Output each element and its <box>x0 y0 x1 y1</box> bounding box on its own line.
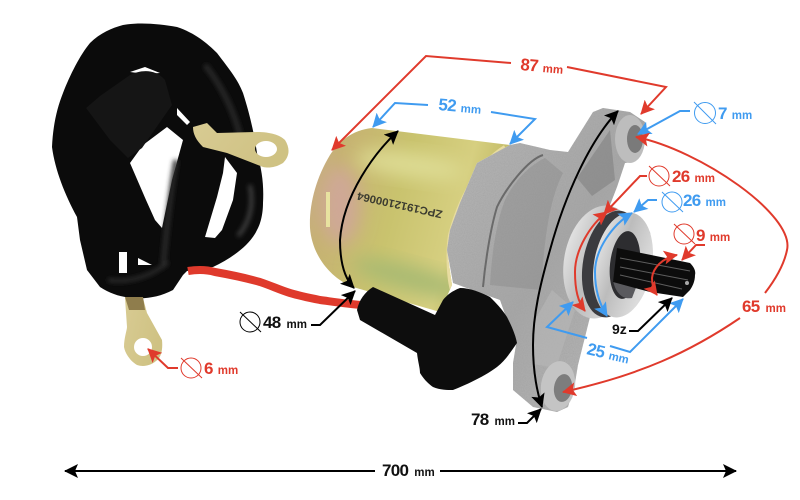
dimension: 52 mm can length: 52 mm <box>438 95 482 118</box>
black sleeved cable loop <box>52 24 263 298</box>
dimension: 9 teeth <box>612 298 672 337</box>
rubber boot loop <box>86 71 172 158</box>
dimension: 26 mm blue nose diameter: 26 mm <box>683 191 726 210</box>
dimension: 700 mm cable length: 700 mm <box>382 461 435 480</box>
rubber o-ring <box>574 206 650 322</box>
engraved serial number: ZPC1912100064 <box>355 189 444 220</box>
machined flange ring <box>555 200 645 324</box>
bottom mounting hole <box>552 373 574 403</box>
aluminium housing and flange <box>447 108 653 413</box>
dimension: 7 mm mounting hole <box>638 102 752 134</box>
dimension: 6 mm terminal hole <box>148 349 238 378</box>
dimension: 9 mm shaft diameter: 9 mm <box>696 226 730 245</box>
steel motor can <box>310 128 510 312</box>
top mounting boss <box>615 115 645 163</box>
dimension: 26 mm blue nose diameter <box>595 191 726 316</box>
rubber terminal boot <box>357 287 517 390</box>
housing shading <box>483 155 543 287</box>
dimension: 25 mm nose length <box>547 299 683 368</box>
dimension: 65 mm hole spacing: 65 mm <box>742 297 786 316</box>
dimension: 87 mm overall length: 87 mm <box>520 55 564 78</box>
dimension: 6 mm terminal hole: 6 mm <box>204 359 238 378</box>
dimension: 9 mm shaft diameter <box>652 224 730 295</box>
dimension: 48 mm can diameter <box>240 131 398 332</box>
bottom mounting boss <box>538 359 578 413</box>
dimension: 7 mm mounting hole: 7 mm <box>718 104 752 123</box>
top mounting hole <box>627 125 643 153</box>
cable bundle with terminals <box>52 24 362 366</box>
dimension: 78 mm flange height <box>471 111 618 429</box>
starter motor <box>310 108 695 413</box>
dimension: 48 mm can diameter: 48 mm <box>263 313 307 332</box>
cable highlights <box>108 65 252 281</box>
dimension: 52 mm can length <box>373 95 535 144</box>
dimension: 26 mm red flange diameter: 26 mm <box>672 167 715 186</box>
dimension: 65 mm hole spacing <box>563 137 787 392</box>
front nose disc <box>585 208 661 322</box>
dimension: 9 teeth: 9z <box>612 321 627 337</box>
dimension: 78 mm flange height: 78 mm <box>471 410 515 429</box>
dimension: 25 mm nose length: 25mm <box>585 339 631 368</box>
red wire <box>188 270 362 305</box>
dimension: 87 mm overall length <box>332 55 666 150</box>
dimension: 26 mm red flange diameter <box>575 166 715 311</box>
ring terminal bottom <box>124 298 162 366</box>
bore <box>607 230 643 300</box>
splined shaft <box>613 248 695 297</box>
ring terminal top <box>193 123 289 168</box>
